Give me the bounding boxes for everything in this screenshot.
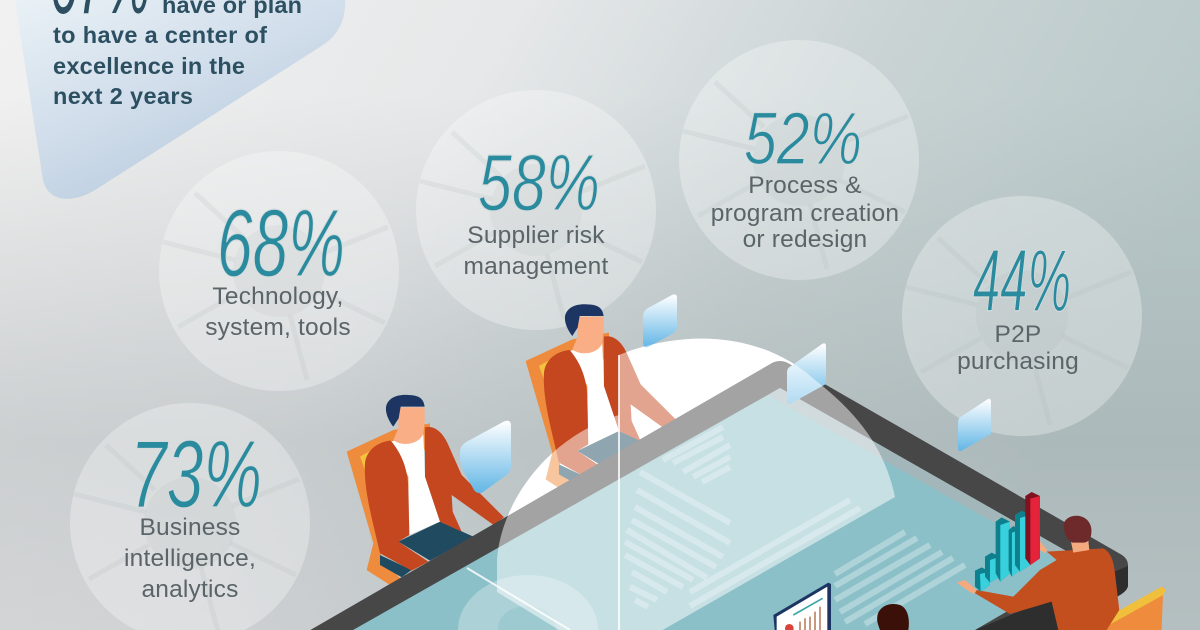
callout panel: center of excellence — [14, 0, 345, 199]
stat circle: 68% technology: 68% — [217, 190, 345, 297]
3D bar chart — [975, 492, 1040, 592]
stat circle: 73% business intelligence: Business — [139, 514, 241, 541]
stat circle: 52% process: or redesign — [743, 226, 867, 253]
callout text: to have a center of — [53, 22, 267, 48]
stat circle: 44% P2P — [902, 196, 1142, 436]
stat circle: 52% process: Process & — [748, 172, 862, 199]
stat circle: 68% technology: Technology, — [212, 283, 344, 310]
icon: floating tablet 3 — [787, 343, 826, 404]
icon: floating tablet 1 — [460, 421, 511, 493]
stat circle: 68% technology — [159, 151, 399, 391]
stat circle: 44% P2P: purchasing — [957, 348, 1079, 375]
conference table — [300, 361, 1128, 630]
icon: floating tablet 2 — [643, 294, 677, 348]
stat circle: 44% P2P: P2P — [995, 321, 1041, 348]
white dome backdrop — [497, 339, 895, 630]
inset pie chart on table — [458, 575, 598, 630]
figure: man at right corner — [957, 516, 1166, 630]
stat circle: 58% supplier risk: management — [463, 253, 609, 280]
document stripes on table — [625, 427, 965, 624]
stat circle: 58% supplier risk: 58% — [478, 138, 600, 227]
stat circle: 58% supplier risk — [416, 90, 656, 330]
stat circle: 52% process — [679, 40, 919, 280]
stat circle: 73% business intelligence: intelligence, — [124, 545, 256, 572]
figure: man seated left — [347, 395, 504, 585]
stat circle: 52% process: 52% — [744, 97, 862, 180]
figure: person at bottom — [877, 604, 909, 630]
stat circle: 73% business intelligence: 73% — [130, 421, 262, 528]
stat circle: 68% technology: system, tools — [205, 314, 351, 341]
laptop — [773, 583, 831, 630]
stat circle: 58% supplier risk: Supplier risk — [467, 222, 605, 249]
callout text: next 2 years — [53, 83, 193, 109]
translucent glass panels — [467, 339, 895, 630]
icon: floating tablet 4 — [958, 399, 991, 451]
stat circle: 73% business intelligence: analytics — [141, 576, 239, 603]
stat circle: 52% process: program creation — [711, 200, 899, 227]
stat circle: 44% P2P: 44% — [973, 231, 1071, 330]
figure: man seated centre — [526, 304, 683, 494]
stat circle: 73% business intelligence — [70, 403, 310, 630]
callout text: excellence in the — [53, 53, 245, 79]
